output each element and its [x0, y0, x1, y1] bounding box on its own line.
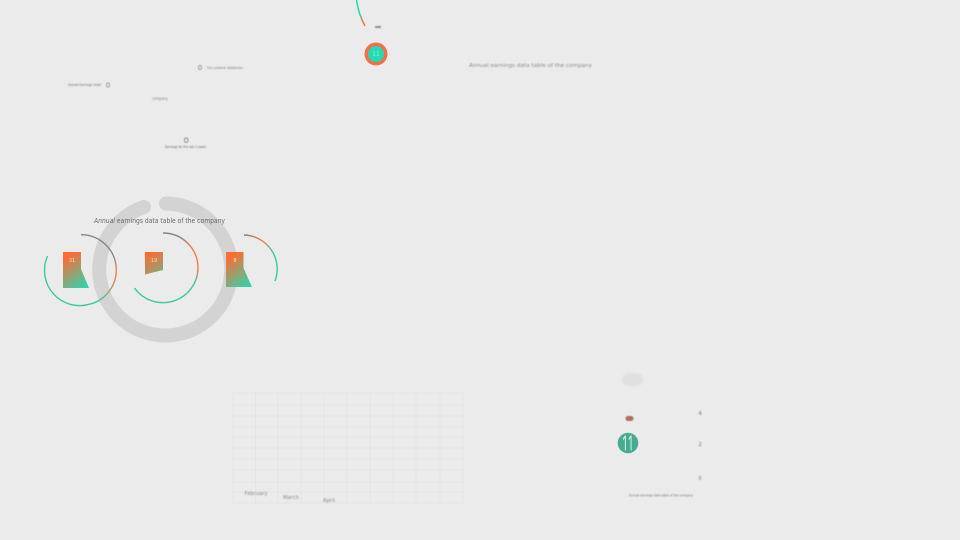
label: Overall Earnings Chart: Overall Earnings Chart [68, 83, 101, 87]
top circle badge: 11 [372, 51, 380, 58]
large gray ring [99, 204, 231, 335]
ring: left [44, 235, 116, 306]
value: 4: 4 [698, 411, 702, 417]
axis label: March: March [283, 495, 299, 501]
block: 31: 31 [69, 258, 75, 264]
green circle badge: 11 [622, 431, 634, 459]
axis label: April: April [323, 498, 335, 504]
top faded title: Annual earnings data table of the company [469, 63, 593, 69]
top circle badge [364, 42, 388, 66]
label: Earnings for the last 3 years [165, 138, 206, 149]
label: Our customer satisfaction: Our customer satisfaction [207, 66, 243, 70]
green circle badge [618, 432, 638, 454]
caption: Annual earnings data table of the company [629, 494, 694, 498]
label: company: company [152, 97, 168, 102]
chart title: Annual earnings data table of the company [93, 217, 225, 225]
axis label: February: February [244, 491, 268, 497]
block: 19: 19 [151, 258, 157, 264]
pale pill [622, 373, 643, 386]
ring: right [244, 235, 277, 281]
label: Earnings for the last 3 years: Earnings for the last 3 years [165, 144, 206, 149]
block: 31 [63, 252, 89, 288]
block: 8: 8 [233, 258, 237, 264]
top small label [375, 26, 381, 28]
brown marker [626, 416, 634, 421]
ring: middle [134, 233, 198, 303]
block: 8 [226, 252, 252, 287]
top arc [356, 0, 365, 26]
grid chart [233, 393, 463, 503]
value: 0: 0 [698, 476, 702, 482]
label: Our customer satisfaction [198, 66, 243, 70]
block: 19 [145, 252, 163, 274]
value: 2: 2 [698, 442, 702, 448]
